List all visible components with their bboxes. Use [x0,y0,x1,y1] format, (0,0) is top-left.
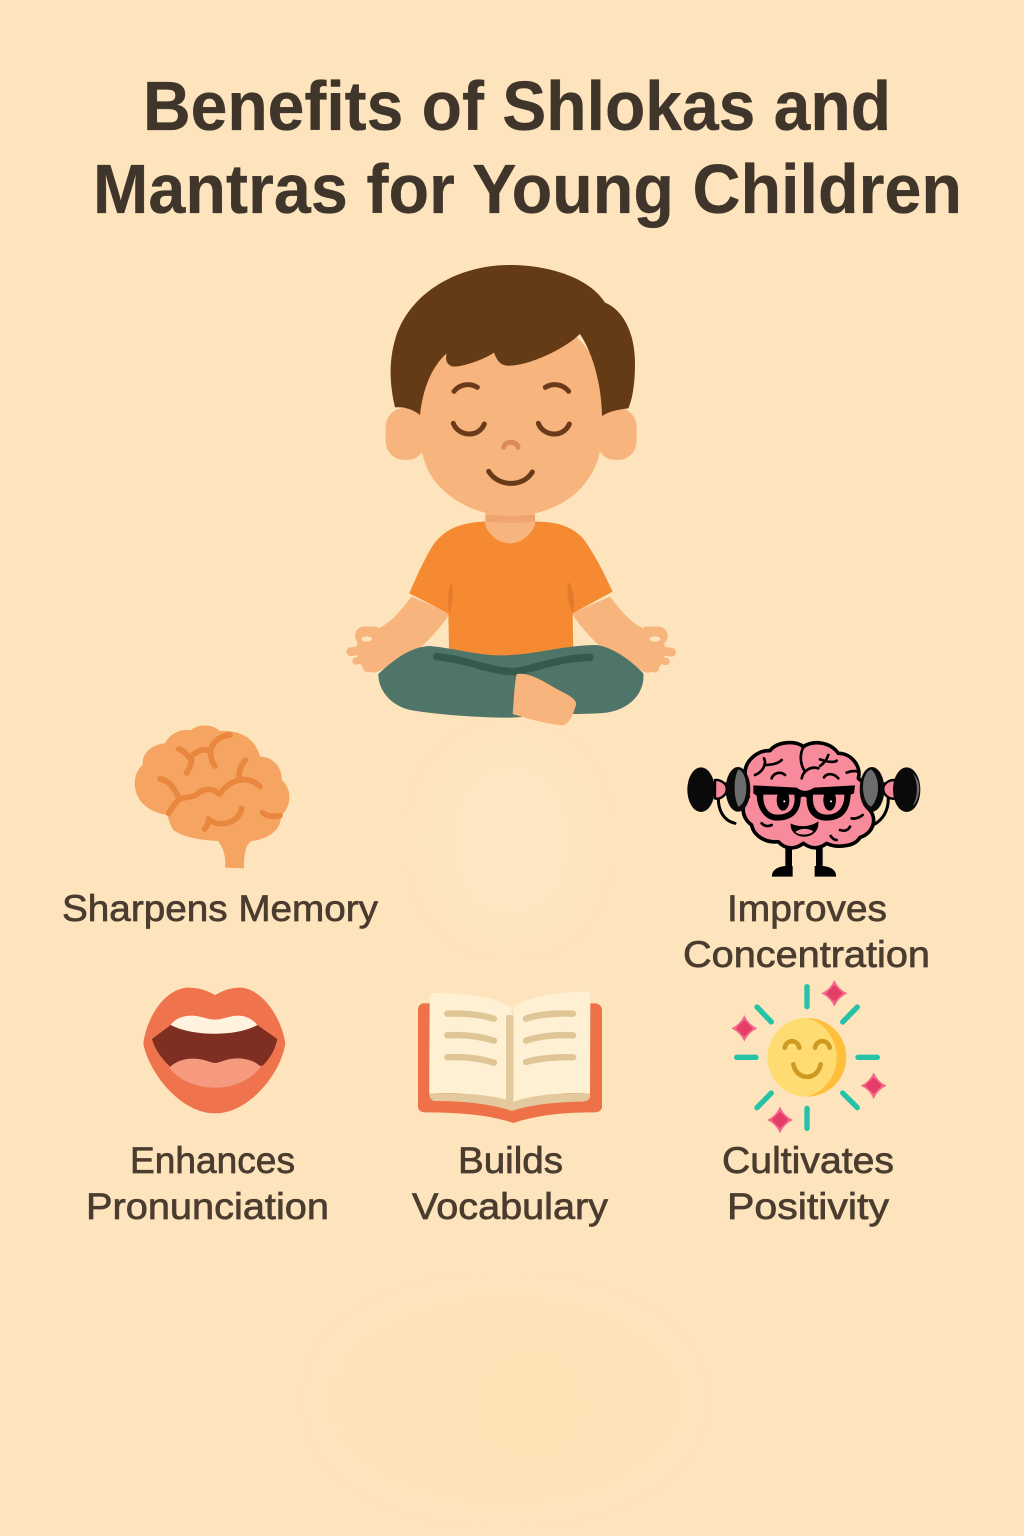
title: Benefits of Shlokas and [143,67,891,145]
arms [718,798,888,825]
brain creases [755,747,863,840]
label: Builds Vocabulary: Builds [458,1140,563,1181]
mouth [791,821,818,837]
icon: brain [135,725,289,868]
hair [391,265,635,416]
sun face [768,1018,846,1097]
sparkles [731,980,887,1133]
icon: strong brain with glasses and dumbbells [687,743,920,877]
brain body [743,743,874,848]
icon: smiling sun with sparkles [731,980,887,1133]
illustration: meditating child [351,265,672,725]
glasses [753,785,855,821]
label: Improves Concentration [683,888,930,975]
arms [351,597,672,673]
label: Improves Concentration: Concentration [683,934,930,975]
sun rays [737,987,877,1128]
label: Enhances Pronunciation [86,1140,329,1227]
eyes [777,789,836,811]
head [419,317,603,516]
dumbbells [687,767,920,812]
icon: open mouth [143,988,285,1113]
face [453,385,569,483]
label: Builds Vocabulary: Vocabulary [412,1186,609,1227]
ears [386,408,637,460]
label: Cultivates Positivity [722,1140,894,1227]
label: Enhances Pronunciation: Enhances [130,1140,295,1181]
legs [772,843,836,877]
legs [378,645,643,725]
shirt [409,522,613,658]
label: Enhances Pronunciation: Pronunciation [86,1186,329,1227]
title [93,67,962,228]
label: Improves Concentration: Improves [727,888,887,929]
title: Mantras for Young Children [93,150,962,228]
label: Sharpens Memory: Sharpens Memory [62,888,379,929]
label: Cultivates Positivity: Cultivates [722,1140,894,1181]
label: Builds Vocabulary [412,1140,609,1227]
neck [485,507,535,543]
icon: open book [418,992,602,1123]
label: Cultivates Positivity: Positivity [727,1186,890,1227]
